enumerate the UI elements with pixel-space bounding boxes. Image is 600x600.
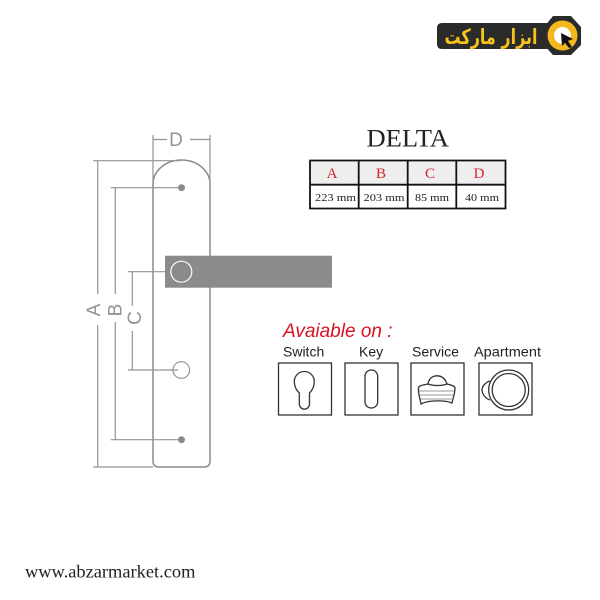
icon: service turn knob	[411, 363, 464, 415]
option labels	[283, 344, 541, 360]
bottom screw dot	[178, 436, 185, 443]
icon: key slot	[345, 363, 398, 415]
icon: switch euro cylinder	[278, 363, 332, 415]
logo text: ابزار مارکت	[444, 25, 538, 49]
website url: www.abzarmarket.com	[25, 562, 196, 582]
dimension A	[84, 161, 181, 467]
logo: abzar market	[437, 16, 581, 55]
lever handle	[165, 256, 332, 288]
table values: 203 mm	[364, 192, 405, 204]
table headers: A	[327, 166, 338, 182]
dimension B	[106, 188, 181, 440]
dimensions table	[310, 160, 506, 208]
option labels: Apartment	[474, 344, 541, 360]
dimension C	[125, 272, 178, 370]
dimension D	[153, 130, 210, 184]
plate outline	[153, 160, 210, 467]
title: DELTA	[366, 124, 450, 152]
dimension B: B	[106, 304, 126, 316]
dimension D: D	[169, 130, 183, 151]
table values	[315, 192, 499, 204]
handle spindle circle	[171, 261, 192, 282]
option labels: Switch	[283, 344, 324, 360]
table headers: B	[376, 166, 386, 182]
table values: 40 mm	[465, 192, 499, 204]
availability heading: Avaiable on :	[282, 321, 393, 342]
logo octagon emblem	[544, 16, 581, 55]
table values: 85 mm	[415, 192, 449, 204]
option labels: Key	[359, 344, 383, 360]
logo bar	[437, 23, 550, 49]
dimension C: C	[125, 311, 146, 325]
table headers	[327, 166, 485, 182]
table headers: D	[474, 166, 485, 182]
handle technical drawing	[84, 130, 332, 467]
option labels: Service	[412, 344, 459, 360]
table headers: C	[425, 166, 435, 182]
dimension A: A	[84, 303, 105, 316]
icon: apartment round knob	[479, 363, 532, 415]
top screw dot	[178, 184, 185, 191]
table values: 223 mm	[315, 192, 356, 204]
lower cylinder circle	[173, 362, 190, 378]
